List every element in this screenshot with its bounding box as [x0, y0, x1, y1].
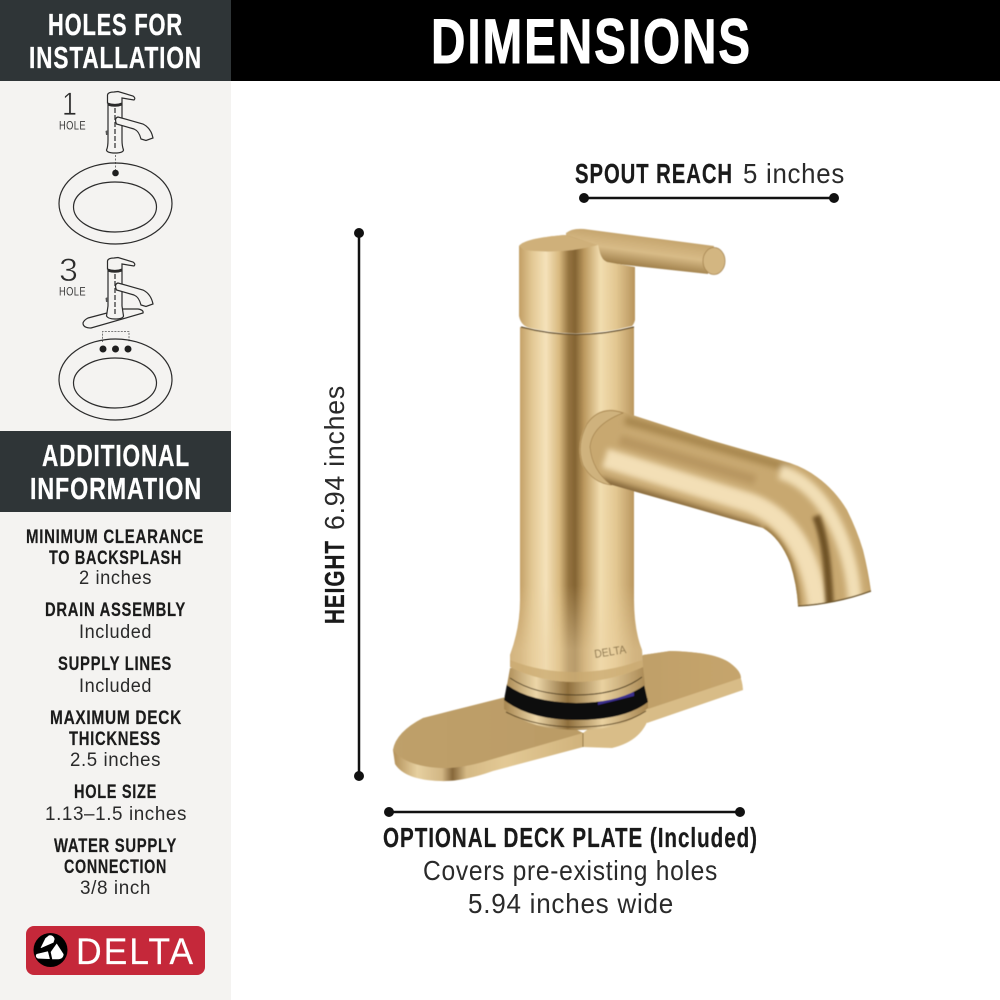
text block: maximum deck thickness: THICKNESS — [69, 729, 161, 750]
text block: drain assembly: Included — [79, 622, 152, 643]
icon: three hole installation — [59, 252, 172, 420]
text block: water supply connection: CONNECTION — [64, 857, 167, 878]
text block: hole size: 1.13–1.5 inches — [45, 804, 187, 825]
dimension: height: 6.94 inches — [319, 385, 350, 530]
faucet body — [510, 327, 643, 682]
icon: three hole installation: HOLE — [59, 284, 86, 298]
panel: additional information header: INFORMATION — [30, 471, 202, 506]
icon: one hole installation — [59, 86, 172, 244]
icon: one hole installation: 1 — [62, 86, 77, 122]
logo: delta — [26, 926, 205, 975]
text block: supply lines: Included — [79, 676, 152, 697]
panel: holes for installation header — [0, 0, 231, 81]
text block: supply lines — [58, 654, 172, 697]
text block: drain assembly: DRAIN ASSEMBLY — [45, 600, 186, 621]
dimension: height: HEIGHT — [319, 540, 350, 624]
text block: water supply connection — [54, 836, 177, 899]
text block: drain assembly — [45, 600, 186, 643]
text block: minimum clearance: 2 inches — [79, 568, 152, 589]
title banner: dimensions: DIMENSIONS — [431, 7, 752, 77]
text block: water supply connection: 3/8 inch — [80, 878, 151, 899]
dimension: optional deck plate: OPTIONAL DECK PLATE (Included) — [383, 822, 758, 853]
text block: water supply connection: WATER SUPPLY — [54, 836, 177, 857]
panel: additional information header — [0, 431, 231, 512]
panel: holes for installation header: HOLES FOR — [48, 7, 183, 42]
sidebar panel background — [0, 0, 231, 1000]
spout — [578, 410, 872, 606]
dimension: spout reach: SPOUT REACH — [575, 158, 733, 189]
text block: maximum deck thickness — [50, 708, 182, 771]
dimension: optional deck plate: 5.94 inches wide — [468, 888, 674, 919]
logo: delta: DELTA — [76, 931, 195, 972]
deck plate — [393, 651, 743, 781]
lever end — [703, 248, 725, 274]
text block: minimum clearance — [26, 527, 204, 589]
text block: hole size — [45, 782, 187, 825]
dimension: spout reach — [575, 158, 845, 203]
engraved logo: DELTA — [594, 644, 627, 661]
text block: maximum deck thickness: MAXIMUM DECK — [50, 708, 182, 729]
icon: three hole installation: 3 — [59, 252, 78, 288]
text block: minimum clearance: MINIMUM CLEARANCE — [26, 527, 204, 548]
icon: one hole installation: HOLE — [59, 118, 86, 132]
lever handle — [566, 229, 714, 274]
text block: supply lines: SUPPLY LINES — [58, 654, 172, 675]
title banner: dimensions — [231, 0, 1000, 81]
handle cap — [519, 235, 635, 334]
collar and black ring — [504, 667, 648, 730]
spout outlet lip — [798, 591, 871, 606]
text block: minimum clearance: TO BACKSPLASH — [49, 548, 182, 569]
dimension: optional deck plate: Covers pre-existing holes — [423, 855, 718, 886]
dimension: spout reach: 5 inches — [743, 158, 845, 189]
illustration: gold faucet with deck plate — [393, 229, 880, 781]
spout flange rim — [580, 411, 623, 485]
dimension: optional deck plate — [383, 807, 758, 919]
text block: maximum deck thickness: 2.5 inches — [70, 750, 161, 771]
panel: holes for installation header: INSTALLATION — [29, 40, 202, 75]
dimension: height — [319, 228, 364, 781]
panel: additional information header: ADDITIONAL — [42, 438, 190, 473]
text block: hole size: HOLE SIZE — [74, 782, 157, 803]
